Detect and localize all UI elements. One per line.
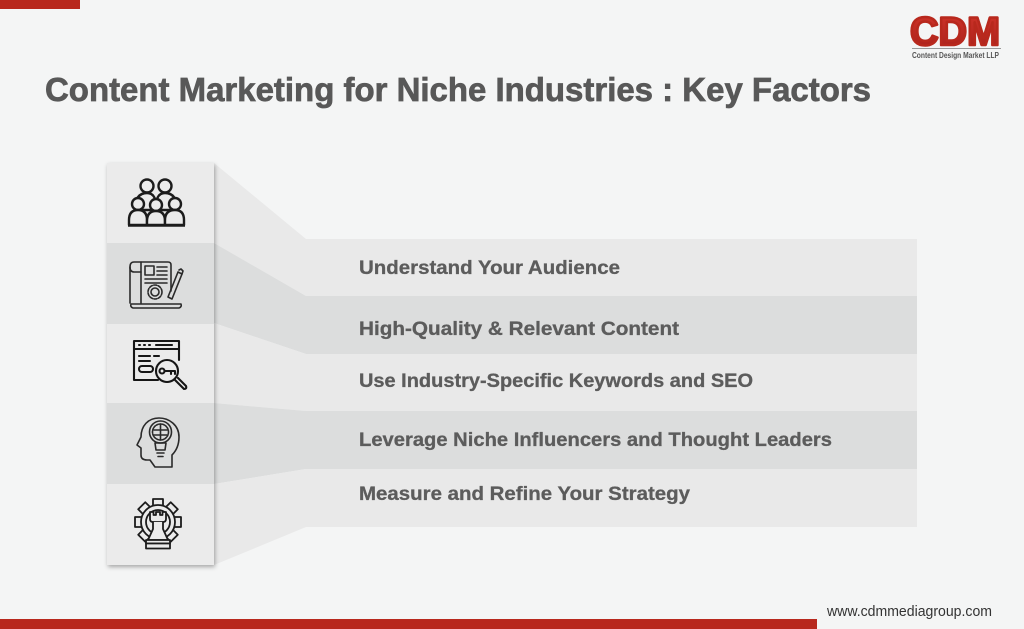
logo: CDM: CDM [910,10,1000,54]
band 3 [214,323,917,411]
logo: CDM: Content Design Market LLP [912,51,1000,60]
icon: content document [130,262,183,308]
label: measure and refine: Measure and Refine Your Strategy [359,483,690,505]
band 2 [214,243,917,354]
label: high-quality content: High-Quality & Relevant Content [359,318,680,340]
website url: www.cdmmediagroup.com [826,604,992,620]
band 4 [214,403,917,484]
title: Content Marketing for Niche Industries : Key Factors [45,72,871,109]
band 1 [214,163,917,296]
bottom accent bar [0,619,817,629]
label: keywords and SEO: Use Industry-Specific Keywords and SEO [359,370,753,392]
top accent bar [0,0,80,9]
panel: icon column [107,163,214,565]
icon: audience [128,180,185,226]
band 5 [214,469,917,565]
panel: funnel bands [214,163,917,565]
label: understand your audience: Understand Your Audience [359,257,620,279]
icon: head with brain bulb [137,418,179,467]
icon: chess rook in gear [135,499,181,548]
label: influencers: Leverage Niche Influencers and Thought Leaders [359,429,832,451]
icon: keyword search [134,341,186,389]
